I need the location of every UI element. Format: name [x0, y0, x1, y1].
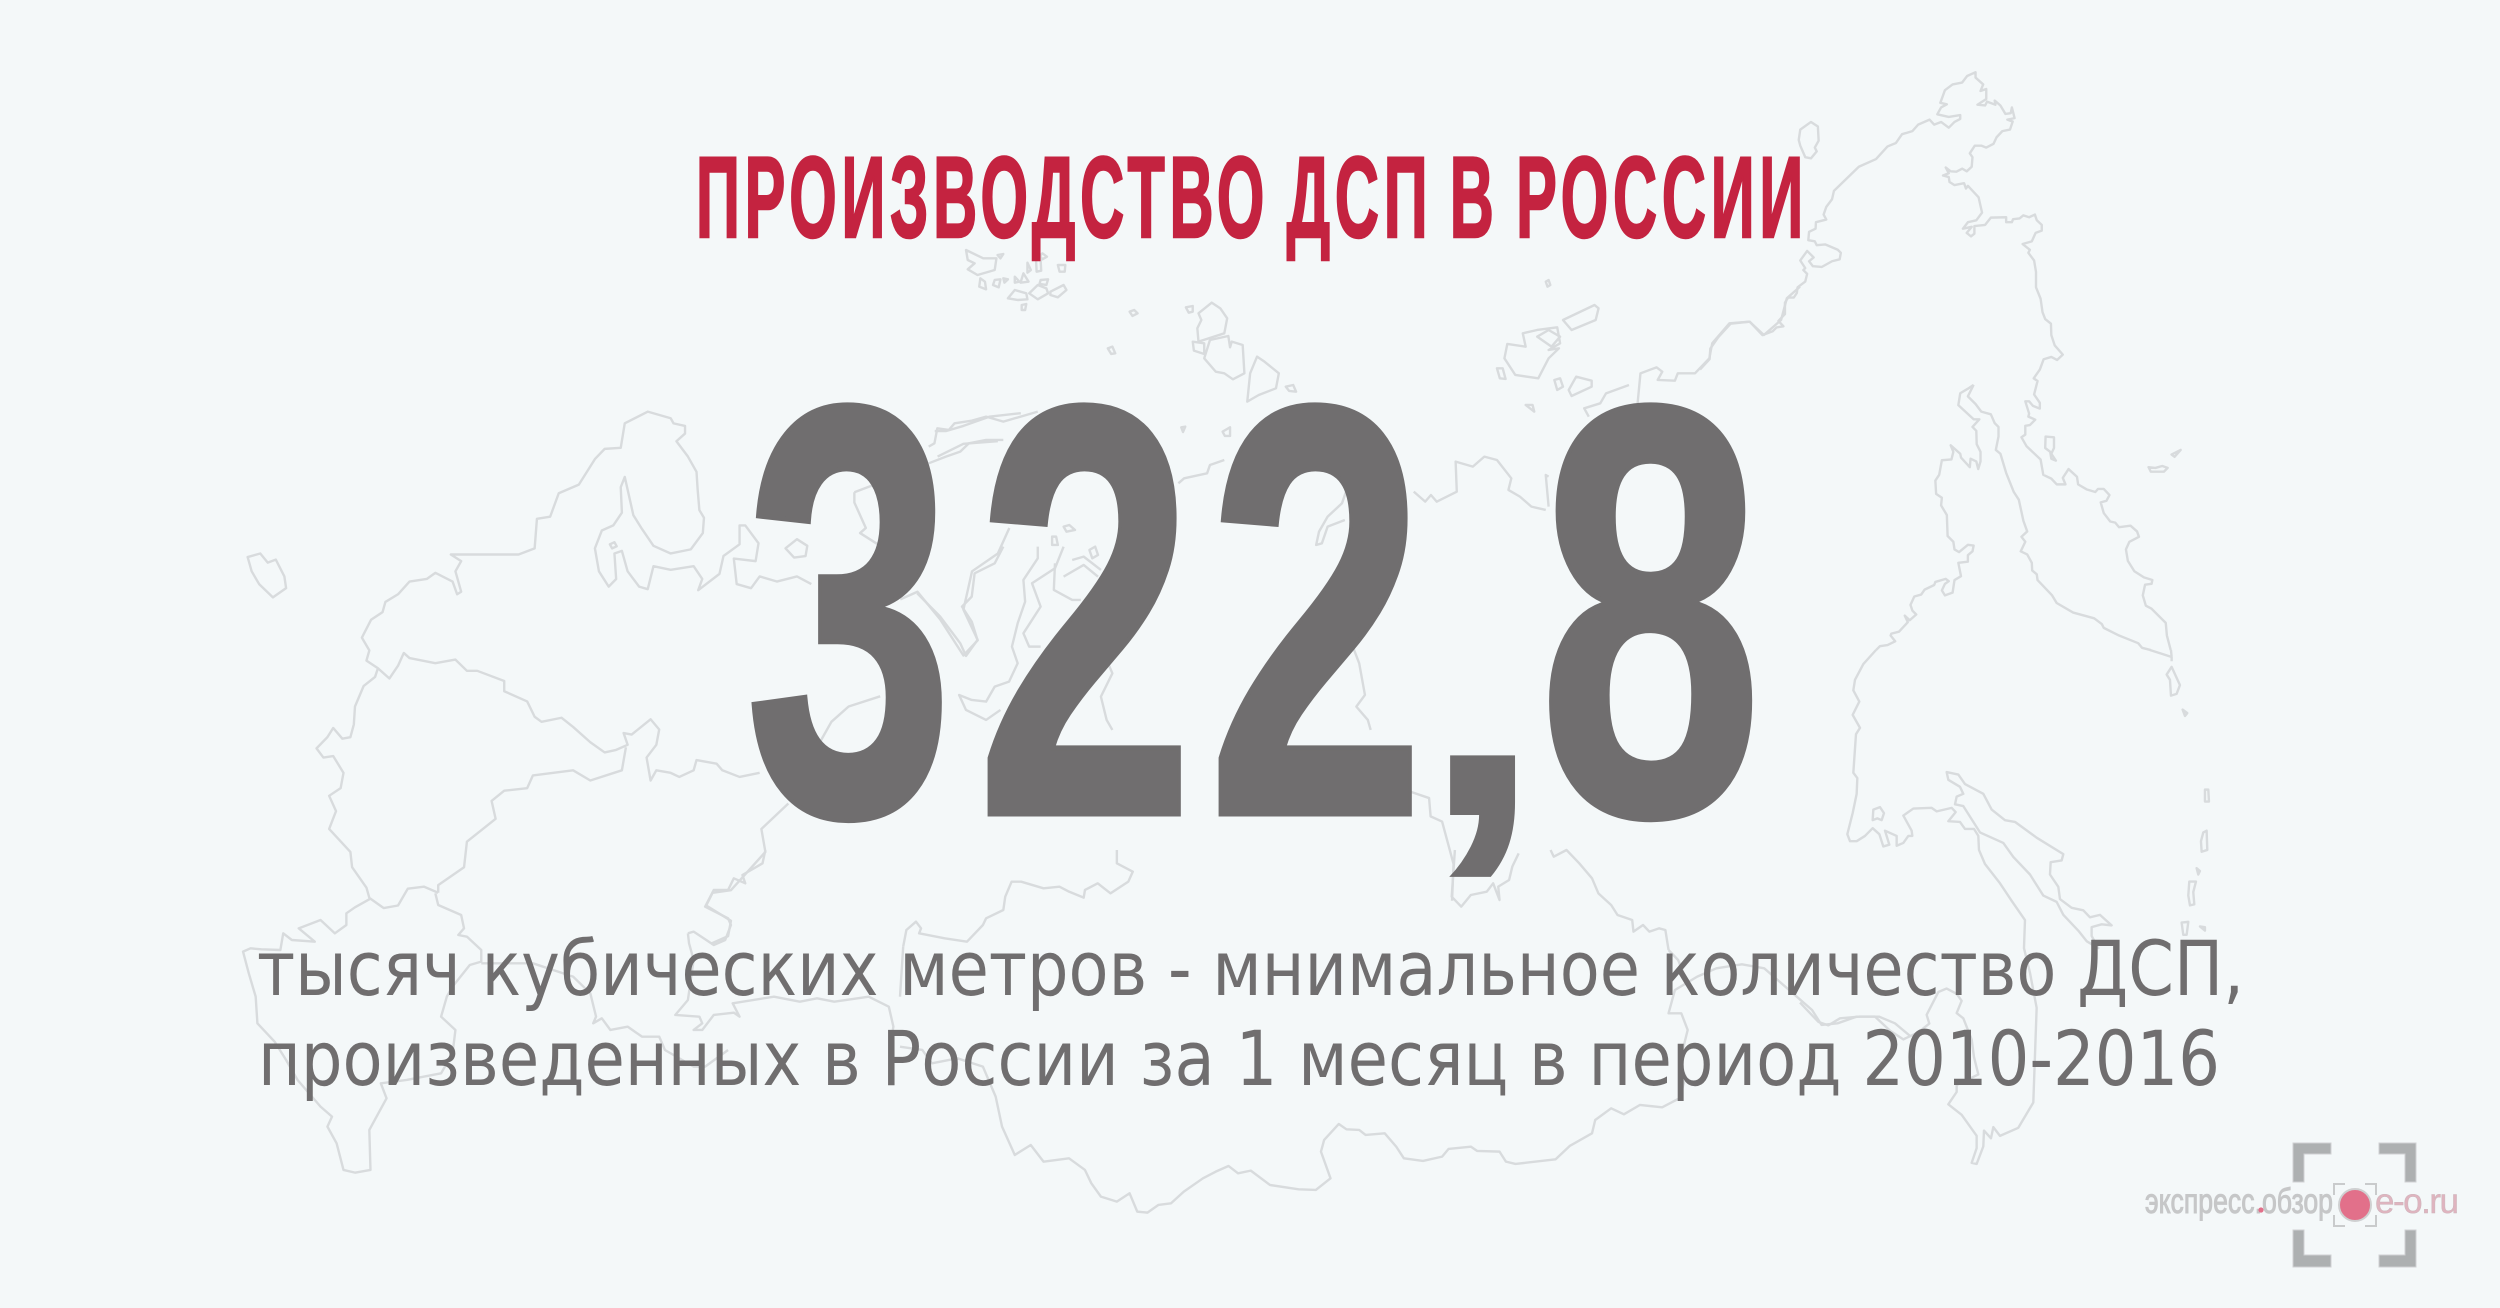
big number 322,8 [745, 283, 1763, 939]
logo: express-obzor watermark [2145, 1143, 2459, 1267]
big number 322,8: 2 [976, 284, 1195, 938]
logo text domain: e-o.ru [2375, 1182, 2459, 1221]
big number 322,8: 3 [745, 284, 954, 939]
big number 322,8: 8 [1538, 283, 1763, 939]
logo frame corners [2293, 1143, 2416, 1267]
caption text [257, 924, 2244, 1103]
caption line 1: тысяч кубических метров - мнимальное количество ДСП, [257, 924, 2244, 1013]
logo circle [2339, 1189, 2371, 1221]
map of Russia outline [243, 72, 2209, 1213]
caption line 2: произведенных в России за 1 месяц в период 2010-2016 [258, 1014, 2220, 1103]
logo dot [2258, 1207, 2264, 1213]
logo inner brackets [2334, 1184, 2376, 1226]
logo text russian: экспресс.обзор [2145, 1182, 2333, 1221]
big number 322,8: , [1418, 454, 1546, 900]
big number 322,8: 2 [1207, 284, 1426, 938]
